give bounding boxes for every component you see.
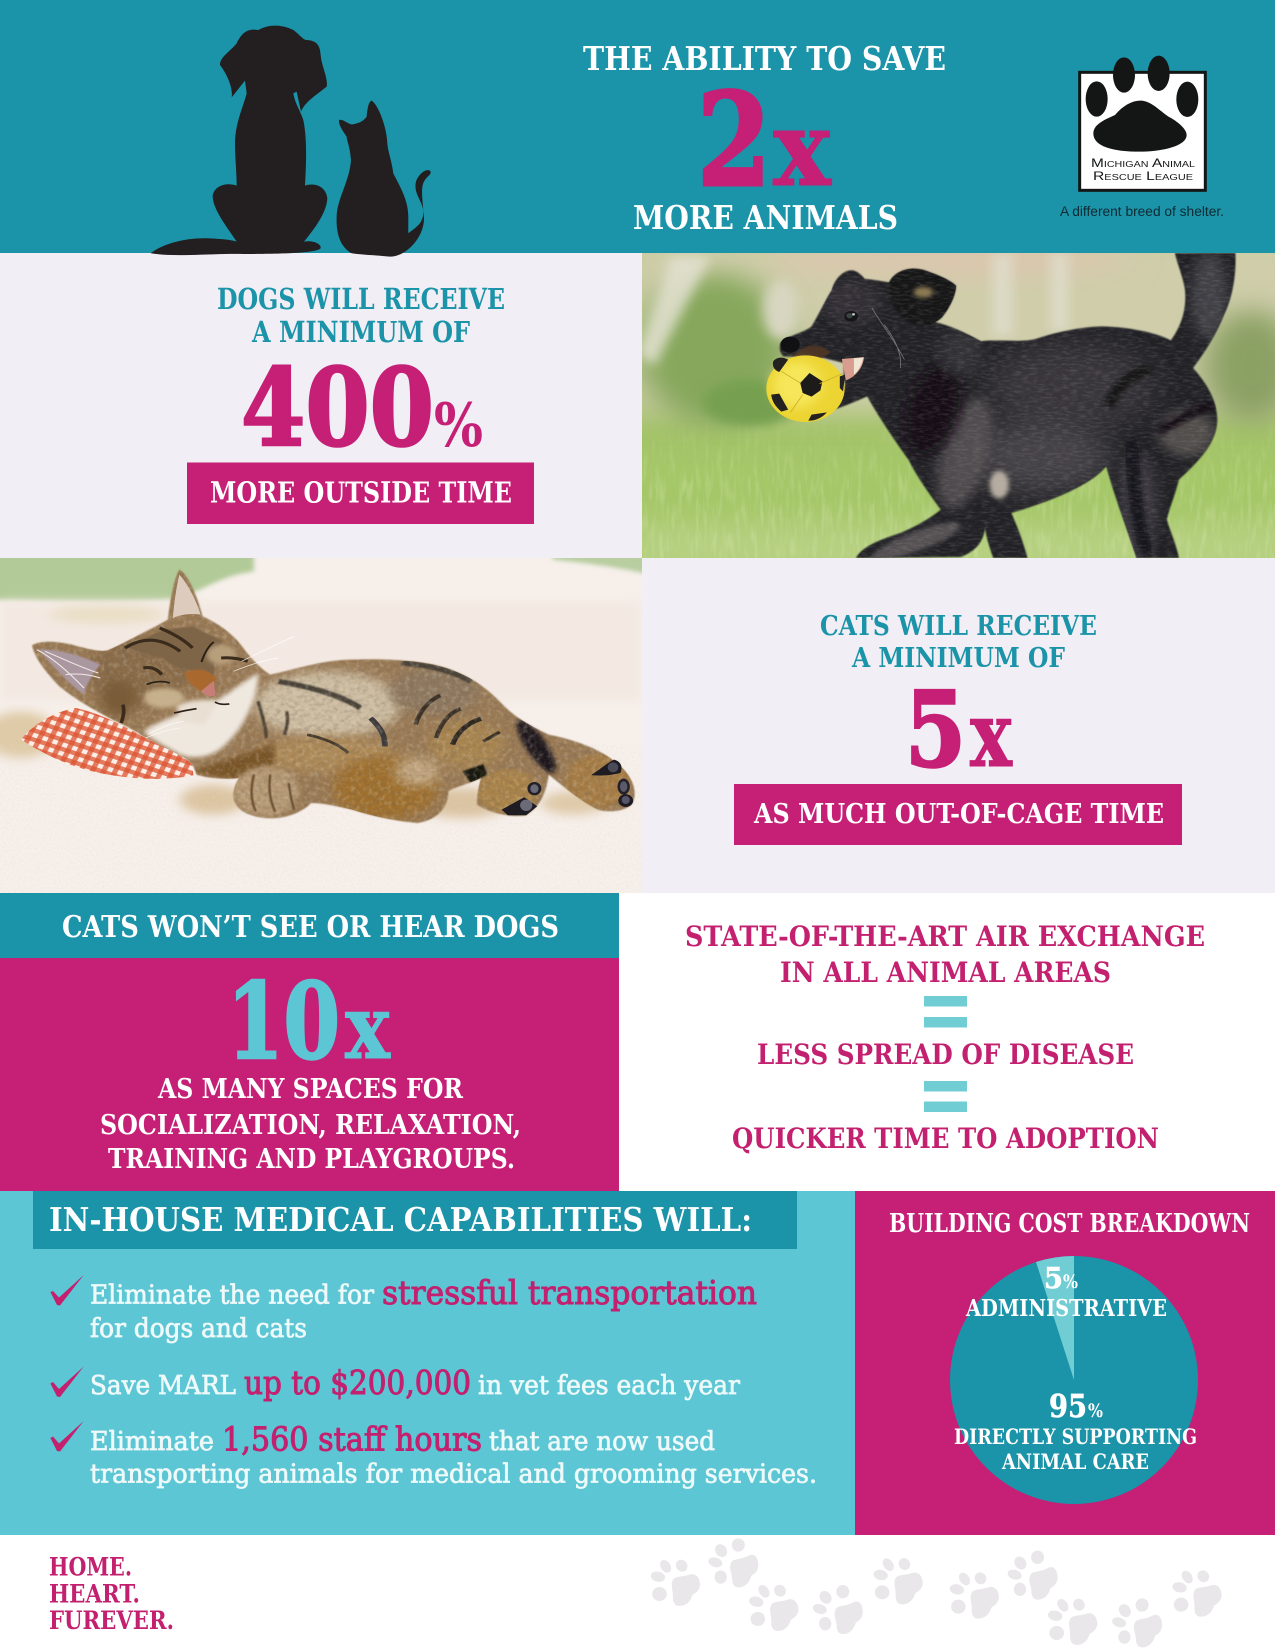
dog silhouette [151, 26, 327, 255]
logo: Michigan Animal Rescue League: Rescue League [1093, 171, 1193, 183]
text: as many spaces: SOCIALIZATION, RELAXATION, [100, 1110, 521, 1141]
cat silhouette [337, 101, 431, 257]
text: as many spaces: AS MANY SPACES FOR [157, 1074, 463, 1105]
stat: 2x: 2 [697, 66, 771, 216]
stat: 400%: 400 [241, 346, 434, 471]
label: 5% administrative: 5 [1044, 1261, 1063, 1295]
kitten white chin and muzzle [143, 673, 259, 757]
panel: header band [0, 0, 1275, 253]
block: dogs outside time stat [187, 282, 534, 524]
badge: more outside time [187, 462, 534, 524]
label: 5% administrative: ADMINISTRATIVE [965, 1295, 1167, 1322]
bullet: staff hours: Eliminate [90, 1427, 214, 1457]
text: state of the art air exchange: IN ALL ANIMAL AREAS [780, 956, 1111, 989]
stat: 2x [697, 66, 832, 216]
headline: ability to save 2x more animals: THE ABILITY TO SAVE [583, 39, 946, 78]
block: cats out-of-cage stat [734, 611, 1182, 845]
panel: building cost breakdown [855, 1191, 1275, 1535]
stat: 10x: x [345, 975, 391, 1079]
kitten pillow [21, 708, 193, 779]
photo: black dog carrying yellow soccer ball [642, 253, 1275, 558]
bullet: stressful transportation: stressful transportation [382, 1273, 757, 1312]
text: cats will receive: A MINIMUM OF [851, 643, 1065, 674]
icon: equals sign [924, 996, 967, 1028]
bullet: stressful transportation: for dogs and cats [90, 1314, 307, 1344]
panel: 10x spaces [0, 958, 619, 1191]
badge: as much out-of-cage time [734, 784, 1182, 845]
panel: cats won't see or hear dogs heading: CATS WON’T SEE OR HEAR DOGS [62, 910, 559, 945]
icon: dog and cat silhouette [151, 26, 431, 257]
tagline: a different breed of shelter: A different breed of shelter. [1060, 204, 1224, 219]
badge: more outside time: MORE OUTSIDE TIME [210, 476, 512, 510]
headline: ability to save 2x more animals: MORE ANIMALS [633, 198, 898, 237]
text: cats will receive [820, 611, 1097, 674]
stat: 5x: x [970, 682, 1013, 788]
label: 95% directly supporting animal care: 95 [1049, 1387, 1087, 1425]
stat: 400%: % [434, 391, 483, 461]
label: 95% directly supporting animal care [954, 1387, 1197, 1474]
text: dogs will receive [217, 282, 505, 349]
text: quicker time to adoption: QUICKER TIME TO ADOPTION [732, 1122, 1159, 1155]
label: 95% directly supporting animal care: ANIMAL CARE [1001, 1449, 1149, 1474]
label: 95% directly supporting animal care: DIRECTLY SUPPORTING [954, 1424, 1197, 1449]
stat: 5x [905, 668, 1013, 791]
badge: as much out-of-cage time: AS MUCH OUT-OF-CAGE TIME [753, 799, 1164, 830]
panel: footer tagline [49, 1552, 174, 1635]
panel: footer tagline: HEART. [49, 1580, 140, 1608]
bullet: save MARL: up to $200,000 [244, 1363, 471, 1402]
label: 95% directly supporting animal care: % [1088, 1400, 1103, 1422]
photo: sleeping tabby kitten on gingham pillow [0, 545, 663, 901]
text: less spread of disease: LESS SPREAD OF DISEASE [757, 1038, 1134, 1071]
headline: ability to save 2x more animals [583, 39, 946, 237]
stat: 10x: 10 [227, 959, 340, 1083]
stat: 5x: 5 [905, 668, 966, 791]
text: dogs will receive: DOGS WILL RECEIVE [217, 282, 505, 316]
label: 5% administrative: % [1063, 1271, 1078, 1293]
text: cats will receive: CATS WILL RECEIVE [820, 611, 1097, 642]
logo: Michigan Animal Rescue League: Michigan Animal [1091, 158, 1196, 170]
text: state of the art air exchange: STATE-OF-THE-ART AIR EXCHANGE [685, 920, 1205, 953]
bullet: staff hours [50, 1420, 817, 1490]
icon: soccer ball [766, 355, 845, 422]
logo: Michigan Animal Rescue League [1060, 56, 1224, 219]
text: as many spaces: TRAINING AND PLAYGROUPS. [108, 1144, 515, 1175]
stat: 2x: x [773, 87, 832, 210]
label: 5% administrative [965, 1261, 1167, 1322]
bullet: stressful transportation: Eliminate the need for [90, 1280, 375, 1310]
bullet: staff hours: transporting animals for medical and grooming services. [90, 1460, 817, 1490]
bullet: stressful transportation [50, 1273, 757, 1344]
text: state of the art air exchange [685, 920, 1205, 989]
text: as many spaces [100, 1074, 521, 1175]
heading: in-house medical [33, 1191, 797, 1249]
panel: cats text background [642, 558, 1275, 893]
panel: cats won't see or hear dogs heading [0, 893, 619, 958]
bullet: save MARL: in vet fees each year [478, 1371, 741, 1401]
bullet: save MARL [50, 1363, 741, 1402]
bullet: staff hours: that are now used [489, 1427, 715, 1457]
text: dogs will receive: A MINIMUM OF [251, 315, 470, 349]
icon: equals sign [924, 1081, 967, 1112]
pie chart [950, 1256, 1198, 1504]
bullet: staff hours: 1,560 staff hours [222, 1420, 482, 1458]
panel: footer tagline: FUREVER. [49, 1606, 174, 1635]
heading: in-house medical: IN-HOUSE MEDICAL CAPABILITIES WILL: [49, 1200, 752, 1239]
decoration: grey paw prints [649, 1538, 1222, 1647]
panel: dogs text background [0, 253, 642, 558]
panel: air exchange equation [619, 893, 1275, 1191]
bullet: save MARL: Save MARL [90, 1371, 236, 1401]
panel: footer tagline: HOME. [49, 1552, 132, 1582]
panel: in-house medical capabilities [0, 1191, 855, 1535]
